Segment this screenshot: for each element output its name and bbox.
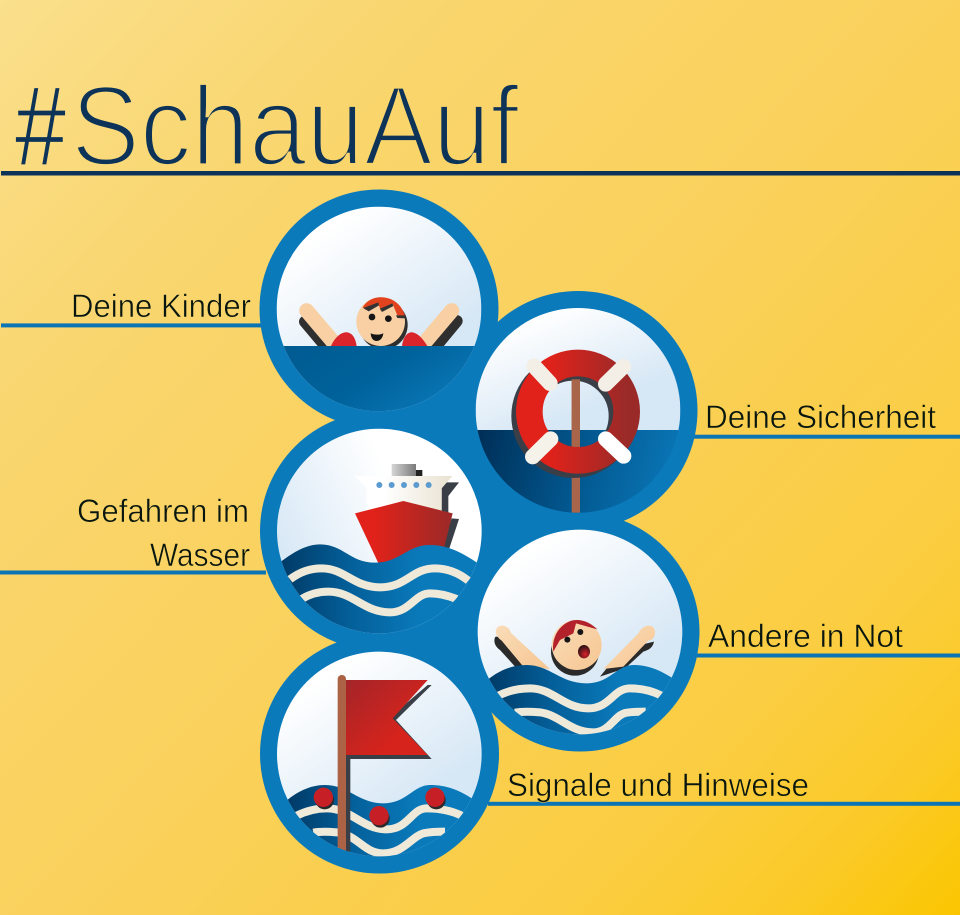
blue connected circle frame: [260, 190, 700, 874]
wave body: [282, 544, 476, 634]
ring shadow: [525, 367, 622, 465]
white wave lower: [515, 712, 646, 732]
left arm: [305, 311, 340, 353]
pole: [338, 675, 346, 853]
red shirt right: [402, 332, 428, 347]
mouth: [578, 645, 590, 658]
label: Deine Sicherheit: Deine Sicherheit: [705, 399, 936, 435]
label: Signale und Hinweise: Signale und Hinweise: [507, 767, 809, 803]
hull shadow: [444, 518, 459, 548]
hair shadow: [363, 302, 406, 318]
connector line: Deine Sicherheit: [690, 435, 960, 439]
white wave lower: [302, 592, 457, 612]
water: [284, 346, 474, 412]
flag shadow: [346, 685, 432, 759]
sky: [477, 529, 683, 736]
left arm shadow: [494, 636, 522, 666]
sky: [476, 308, 680, 431]
connector line: Deine Kinder: [1, 323, 266, 327]
icon: child in water: [273, 207, 487, 416]
wave body: [283, 785, 477, 862]
pole shadow: [345, 757, 350, 852]
white wave lower: [313, 832, 445, 853]
water: [476, 430, 680, 517]
superstructure: [355, 476, 452, 512]
icon: ship on waves: [277, 429, 485, 640]
label: Andere in Not: Andere in Not: [708, 618, 903, 654]
swim cap: [553, 620, 597, 652]
label: Deine Kinder: Deine Kinder: [71, 288, 251, 324]
bridge: [392, 464, 416, 476]
windows: [376, 482, 432, 488]
sky: [277, 651, 482, 857]
left arm: [496, 626, 550, 669]
title: SchauAuf: [71, 63, 520, 189]
eye right: [577, 629, 583, 635]
flag: [346, 680, 428, 755]
eye left: [564, 637, 570, 643]
head shadow: [362, 310, 408, 346]
hair: [363, 297, 405, 316]
connector line: Gefahren im Wasser: [0, 570, 266, 574]
band bottom left: [533, 439, 551, 457]
connector line: Andere in Not: [690, 654, 960, 658]
head: [356, 297, 405, 346]
label: Gefahren im Wasser: Gefahren im: [77, 493, 249, 529]
label: Gefahren im Wasser: Wasser: [150, 537, 250, 573]
band bottom right: [606, 439, 624, 456]
white wave upper: [498, 688, 662, 708]
head: [552, 620, 602, 670]
head shadow: [551, 628, 599, 676]
band top right: [606, 367, 623, 384]
funnel shadow: [416, 470, 422, 476]
hull: [355, 501, 453, 567]
right arm: [418, 311, 457, 353]
red shirt left: [331, 332, 357, 347]
title: #: [15, 63, 66, 189]
pole: [572, 377, 580, 514]
pole front of shadow top: [572, 379, 580, 448]
connector line: Signale und Hinweise: [488, 802, 960, 806]
eye right: [385, 315, 392, 322]
superstructure shadow: [442, 482, 459, 515]
eye left: [369, 314, 375, 320]
ring: [529, 363, 627, 460]
icon: swimmer in distress: [477, 529, 683, 740]
sky: [277, 207, 481, 411]
icon: lifebuoy: [476, 308, 680, 517]
sky: [277, 429, 482, 634]
band top left: [534, 366, 550, 383]
title rule: [1, 171, 960, 176]
right arm: [603, 626, 655, 669]
icon: red flag and buoys: [277, 651, 482, 862]
buoys: [314, 788, 446, 828]
mouth: [371, 333, 383, 341]
white wave upper: [297, 808, 462, 829]
wave body: [483, 665, 680, 740]
right arm shadow: [600, 642, 654, 677]
white wave upper: [290, 568, 468, 587]
